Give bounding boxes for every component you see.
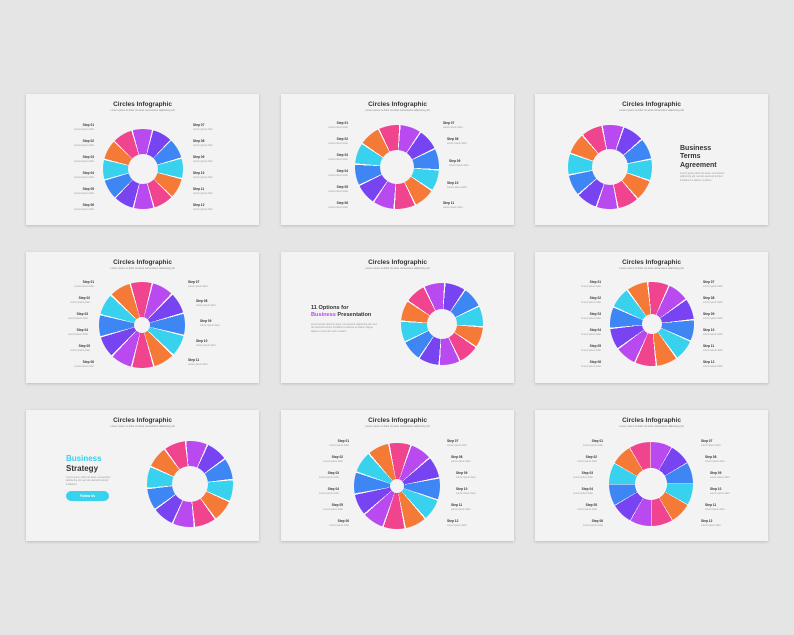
right labels: Lorem ipsum dolor <box>193 192 213 194</box>
left labels: Lorem ipsum dolor <box>583 444 603 446</box>
right labels: Lorem ipsum dolor <box>196 304 216 306</box>
left labels: Lorem ipsum dolor <box>74 160 94 162</box>
donut chart <box>83 266 201 384</box>
donut hole <box>642 314 662 334</box>
left labels: Step 05 <box>83 187 94 191</box>
right labels: Lorem ipsum dolor <box>193 160 213 162</box>
button: Follow Us <box>80 494 95 498</box>
left labels: Lorem ipsum dolor <box>329 524 349 526</box>
heading <box>680 144 717 169</box>
left labels: Step 04 <box>582 487 593 491</box>
title: Circles Infographic <box>113 259 172 266</box>
heading: Business <box>680 145 711 152</box>
right labels: Lorem ipsum dolor <box>188 284 208 288</box>
right labels: Step 09 <box>193 155 204 159</box>
right labels: Lorem ipsum dolor <box>456 492 476 494</box>
left labels: Lorem ipsum dolor <box>581 284 601 288</box>
right labels: Lorem ipsum dolor <box>447 444 467 446</box>
right labels: Step 11 <box>188 358 199 362</box>
title: Circles Infographic <box>113 101 172 108</box>
slide 1 <box>26 94 259 225</box>
left labels: Step 05 <box>590 344 601 348</box>
right labels: Step 12 <box>447 519 458 523</box>
title: Circles Infographic <box>368 259 427 266</box>
right labels <box>447 439 476 526</box>
paragraph: Lorem ipsum dolor sit amet, consectetur adipiscing elit, sed do eiusmod tempor incididunt ut labore et dolore magna aliqua ut enim ad minim veniam <box>311 323 377 333</box>
subtitle: Lorem ipsum is dolor sit amet consectetur adipiscing elit <box>365 109 430 112</box>
left labels: Lorem ipsum dolor <box>74 144 94 146</box>
donut hole <box>592 149 628 185</box>
left labels: Step 01 <box>83 123 94 127</box>
right labels: Step 09 <box>456 471 467 475</box>
right labels: Step 07 <box>188 280 199 284</box>
donut chart <box>337 426 457 546</box>
left labels: Step 02 <box>83 139 94 143</box>
donut hole <box>427 309 457 339</box>
left labels: Lorem ipsum dolor <box>581 348 601 352</box>
left labels: Lorem ipsum dolor <box>328 126 348 128</box>
left labels: Step 05 <box>332 503 343 507</box>
heading <box>311 305 371 318</box>
right labels: Lorem ipsum dolor <box>703 300 723 304</box>
subtitle: Lorem ipsum is dolor sit amet consectetur adipiscing elit <box>365 425 430 428</box>
right labels: Step 11 <box>193 187 204 191</box>
left labels: Step 02 <box>586 455 597 459</box>
left labels: Lorem ipsum dolor <box>70 300 90 304</box>
left labels: Step 03 <box>582 471 593 475</box>
heading: Terms <box>680 153 700 160</box>
heading: Business <box>66 454 102 463</box>
donut chart <box>343 113 451 221</box>
right labels: Lorem ipsum dolor <box>443 126 463 128</box>
left labels: Step 04 <box>590 328 601 332</box>
subtitle: Lorem ipsum is dolor sit amet consectetur adipiscing elit <box>619 425 684 428</box>
subtitle: Lorem ipsum is dolor sit amet consectetur adipiscing elit <box>619 109 684 112</box>
heading: Strategy <box>66 464 98 473</box>
donut chart <box>103 129 183 209</box>
left labels: Lorem ipsum dolor <box>74 176 94 178</box>
right labels: Lorem ipsum dolor <box>703 284 723 288</box>
title: Circles Infographic <box>113 417 172 424</box>
left labels: Step 03 <box>590 312 601 316</box>
heading: 11 Options for <box>311 305 349 311</box>
title: Circles Infographic <box>368 417 427 424</box>
donut hole <box>128 154 158 184</box>
left labels: Step 05 <box>586 503 597 507</box>
right labels: Lorem ipsum dolor <box>447 524 467 526</box>
donut hole <box>636 469 666 499</box>
left labels: Step 04 <box>328 487 339 491</box>
right labels: Lorem ipsum dolor <box>193 144 213 146</box>
donut chart <box>609 442 693 526</box>
right labels: Step 10 <box>456 487 467 491</box>
right labels: Step 09 <box>200 319 211 323</box>
button <box>66 491 109 501</box>
donut chart <box>564 121 656 213</box>
right labels: Step 09 <box>449 159 460 163</box>
slide 9 <box>535 410 768 541</box>
left labels <box>74 123 94 210</box>
left labels <box>319 439 349 526</box>
left labels: Step 05 <box>337 185 348 189</box>
left labels: Lorem ipsum dolor <box>328 174 348 176</box>
right labels: Lorem ipsum dolor <box>200 324 220 326</box>
right labels <box>443 121 469 208</box>
left labels: Lorem ipsum dolor <box>583 524 603 526</box>
paragraph: Lorem ipsum dolor sit amet, consectetur adipiscing elit, sed do eiusmod tempor incididunt ut labore et dolore <box>680 172 724 182</box>
left labels: Step 04 <box>77 328 88 332</box>
right labels: Lorem ipsum dolor <box>447 142 467 144</box>
right labels: Step 12 <box>193 203 204 207</box>
right labels: Step 10 <box>703 328 714 332</box>
right labels: Step 08 <box>196 299 207 303</box>
heading: Agreement <box>680 162 717 169</box>
right labels: Lorem ipsum dolor <box>193 208 213 210</box>
right labels: Lorem ipsum dolor <box>701 444 721 446</box>
right labels: Step 10 <box>710 487 721 491</box>
right labels: Lorem ipsum dolor <box>703 332 723 336</box>
donut hole <box>390 479 404 493</box>
left labels: Step 06 <box>590 360 601 364</box>
title: Circles Infographic <box>622 417 681 424</box>
right labels: Step 08 <box>447 137 458 141</box>
left labels <box>68 280 94 368</box>
left labels: Lorem ipsum dolor <box>323 460 343 462</box>
left labels: Lorem ipsum dolor <box>577 460 597 462</box>
left labels: Step 06 <box>83 203 94 207</box>
right labels: Step 10 <box>196 339 207 343</box>
right labels <box>188 280 220 366</box>
left labels: Step 01 <box>338 439 349 443</box>
right labels <box>701 439 730 526</box>
right labels: Step 09 <box>710 471 721 475</box>
left labels: Step 04 <box>337 169 348 173</box>
left labels: Lorem ipsum dolor <box>74 128 94 130</box>
slide 2 <box>281 94 514 225</box>
right labels: Lorem ipsum dolor <box>710 476 730 478</box>
left labels: Lorem ipsum dolor <box>68 332 88 336</box>
right labels: Lorem ipsum dolor <box>703 316 723 320</box>
right labels: Step 08 <box>703 296 714 300</box>
right labels: Step 09 <box>703 312 714 316</box>
left labels: Step 02 <box>337 137 348 141</box>
right labels: Step 10 <box>193 171 204 175</box>
title: Circles Infographic <box>368 101 427 108</box>
donut chart <box>395 277 489 371</box>
subtitle: Lorem ipsum is dolor sit amet consectetur adipiscing elit <box>619 267 684 270</box>
right labels: Lorem ipsum dolor <box>193 128 213 130</box>
right labels: Step 07 <box>701 439 712 443</box>
left labels: Lorem ipsum dolor <box>70 348 90 352</box>
right labels: Step 11 <box>443 201 454 205</box>
right labels: Step 10 <box>447 181 458 185</box>
left labels: Step 05 <box>79 344 90 348</box>
subtitle: Lorem ipsum is dolor sit amet consectetur adipiscing elit <box>110 425 175 428</box>
left labels: Lorem ipsum dolor <box>573 476 593 478</box>
left labels <box>573 439 603 526</box>
left labels: Lorem ipsum dolor <box>581 332 601 336</box>
right labels: Step 07 <box>447 439 458 443</box>
right labels: Lorem ipsum dolor <box>703 348 723 352</box>
left labels: Lorem ipsum dolor <box>68 316 88 320</box>
left labels: Lorem ipsum dolor <box>328 158 348 160</box>
right labels: Lorem ipsum dolor <box>193 176 213 178</box>
left labels: Lorem ipsum dolor <box>328 206 348 208</box>
title: Circles Infographic <box>622 259 681 266</box>
right labels: Lorem ipsum dolor <box>447 186 467 188</box>
left labels: Step 03 <box>77 312 88 316</box>
slide 4 <box>26 252 259 383</box>
donut hole <box>380 150 414 184</box>
left labels: Step 03 <box>83 155 94 159</box>
heading: Business Presentation <box>311 312 371 318</box>
right labels: Step 07 <box>703 280 714 284</box>
left labels <box>581 280 601 368</box>
left labels: Lorem ipsum dolor <box>319 476 339 478</box>
donut chart <box>140 434 240 534</box>
left labels: Step 04 <box>83 171 94 175</box>
right labels: Step 07 <box>443 121 454 125</box>
left labels: Lorem ipsum dolor <box>581 300 601 304</box>
left labels: Lorem ipsum dolor <box>74 364 94 368</box>
left labels: Step 02 <box>332 455 343 459</box>
right labels: Lorem ipsum dolor <box>451 460 471 462</box>
left labels: Lorem ipsum dolor <box>581 364 601 368</box>
right labels: Lorem ipsum dolor <box>196 344 216 346</box>
left labels: Step 01 <box>590 280 601 284</box>
right labels: Lorem ipsum dolor <box>705 460 725 462</box>
slide 6 <box>535 252 768 383</box>
right labels: Step 08 <box>451 455 462 459</box>
left labels: Step 06 <box>592 519 603 523</box>
right labels: Step 08 <box>193 139 204 143</box>
left labels: Lorem ipsum dolor <box>74 284 94 288</box>
right labels: Lorem ipsum dolor <box>705 508 725 510</box>
heading <box>66 454 102 473</box>
title: Circles Infographic <box>622 101 681 108</box>
left labels: Step 03 <box>337 153 348 157</box>
donut hole <box>172 466 208 502</box>
right labels: Step 07 <box>193 123 204 127</box>
left labels: Step 01 <box>592 439 603 443</box>
right labels: Lorem ipsum dolor <box>710 492 730 494</box>
left labels: Step 01 <box>83 280 94 284</box>
subtitle: Lorem ipsum is dolor sit amet consectetur adipiscing elit <box>110 267 175 270</box>
right labels: Lorem ipsum dolor <box>703 364 723 368</box>
left labels: Lorem ipsum dolor <box>323 508 343 510</box>
subtitle: Lorem ipsum is dolor sit amet consectetur adipiscing elit <box>110 109 175 112</box>
right labels: Lorem ipsum dolor <box>701 524 721 526</box>
subtitle: Lorem ipsum is dolor sit amet consectetur adipiscing elit <box>365 267 430 270</box>
donut hole <box>134 317 150 333</box>
right labels: Lorem ipsum dolor <box>449 164 469 166</box>
right labels: Step 11 <box>703 344 714 348</box>
right labels: Step 12 <box>703 360 714 364</box>
right labels <box>703 280 723 368</box>
slide 8 <box>281 410 514 541</box>
left labels: Lorem ipsum dolor <box>328 142 348 144</box>
left labels: Lorem ipsum dolor <box>74 208 94 210</box>
left labels: Lorem ipsum dolor <box>74 192 94 194</box>
right labels: Step 12 <box>701 519 712 523</box>
paragraph: Lorem ipsum dolor sit amet, consectetur adipiscing elit, sed do eiusmod tempor incididunt <box>66 476 110 486</box>
left labels: Lorem ipsum dolor <box>328 190 348 192</box>
left labels: Step 01 <box>337 121 348 125</box>
left labels <box>328 121 348 208</box>
left labels: Lorem ipsum dolor <box>319 492 339 494</box>
right labels: Step 08 <box>705 455 716 459</box>
slide 5 <box>281 252 514 383</box>
left labels: Lorem ipsum dolor <box>573 492 593 494</box>
slide 3 <box>535 94 768 225</box>
left labels: Step 06 <box>83 360 94 364</box>
left labels: Step 02 <box>79 296 90 300</box>
left labels: Step 06 <box>338 519 349 523</box>
left labels: Step 06 <box>337 201 348 205</box>
right labels <box>193 123 213 210</box>
donut chart <box>593 265 711 383</box>
left labels: Step 02 <box>590 296 601 300</box>
right labels: Lorem ipsum dolor <box>188 362 208 366</box>
right labels: Lorem ipsum dolor <box>443 206 463 208</box>
left labels: Lorem ipsum dolor <box>577 508 597 510</box>
right labels: Lorem ipsum dolor <box>451 508 471 510</box>
slide 7 <box>26 410 259 541</box>
left labels: Lorem ipsum dolor <box>581 316 601 320</box>
right labels: Step 11 <box>451 503 462 507</box>
right labels: Step 11 <box>705 503 716 507</box>
left labels: Lorem ipsum dolor <box>329 444 349 446</box>
left labels: Step 03 <box>328 471 339 475</box>
right labels: Lorem ipsum dolor <box>456 476 476 478</box>
